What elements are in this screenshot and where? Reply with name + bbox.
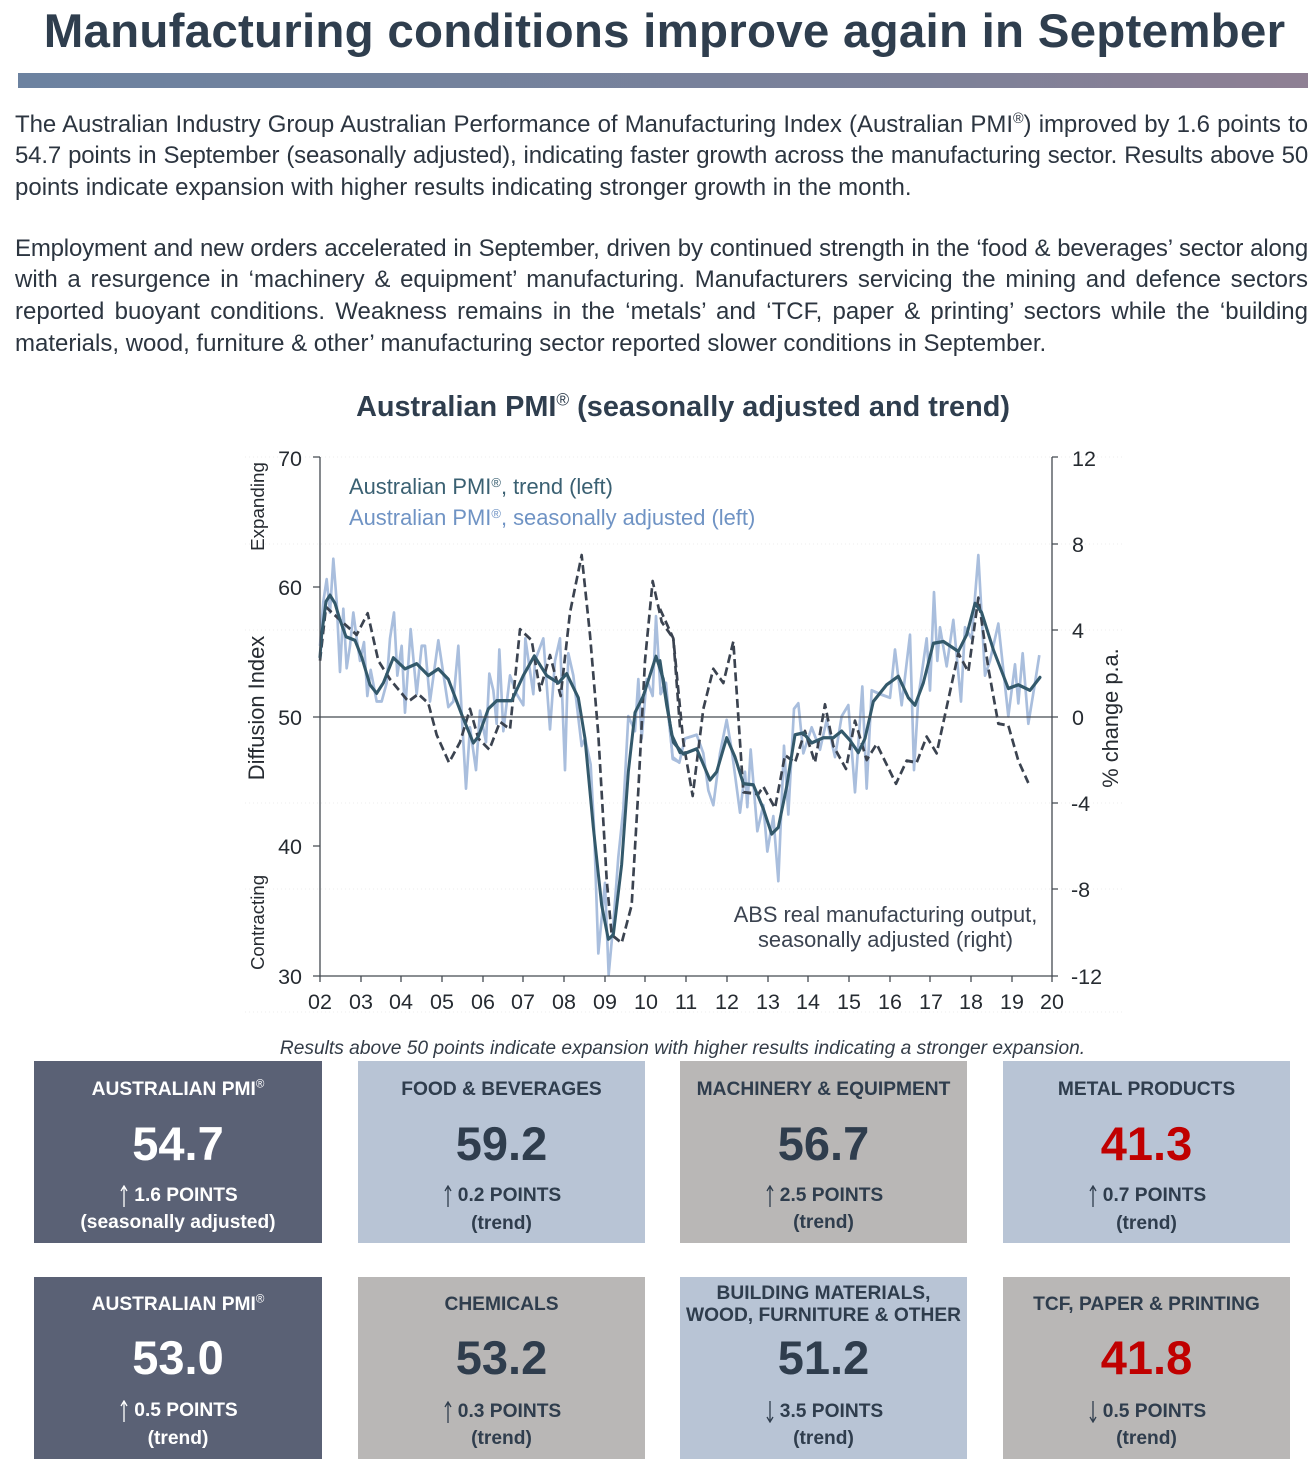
right axis labels: -4 <box>1071 792 1090 816</box>
card: TCF paper and printing: (trend) <box>1116 1428 1177 1449</box>
card: Australian PMI trend: 0.5 POINTS <box>134 1400 238 1421</box>
card: building materials: 3.5 POINTS <box>780 1401 883 1422</box>
x axis labels: 02 <box>308 990 332 1014</box>
card: chemicals: CHEMICALS <box>444 1294 559 1315</box>
card: building materials <box>680 1277 967 1459</box>
intro paragraph 2: Employment and new orders accelerated in September, driven by continued strength in the ‘food & beverages’ sector along <box>15 235 1308 262</box>
x axis labels: 13 <box>756 990 780 1014</box>
left axis labels: 70 <box>278 447 302 471</box>
card: metal products: METAL PRODUCTS <box>1058 1078 1235 1100</box>
card: Australian PMI seasonally adjusted: (seasonally adjusted) <box>80 1212 276 1233</box>
x axis labels: 16 <box>878 990 902 1014</box>
intro paragraph 1 <box>15 111 1308 201</box>
legend: ABS output: seasonally adjusted (right) <box>758 927 1013 952</box>
x axis labels: 18 <box>959 990 983 1014</box>
title rule bar <box>18 73 1308 88</box>
card: machinery and equipment <box>680 1061 967 1243</box>
legend: seasonally adjusted: ® <box>491 506 501 521</box>
right axis labels: -12 <box>1071 965 1102 989</box>
card: food and beverages <box>358 1061 645 1243</box>
card: machinery and equipment: MACHINERY & EQUIPMENT <box>697 1078 950 1100</box>
x axis labels: 11 <box>675 990 697 1014</box>
intro paragraph 1: 54.7 points in September (seasonally adjusted), indicating faster growth across the manufacturing sector. Results above 50 <box>15 142 1308 169</box>
title: Manufacturing conditions improve again in September <box>44 5 1285 58</box>
intro paragraph 2: materials, wood, furniture & other’ manufacturing sector reported slower conditions in September. <box>15 330 1046 357</box>
card: Australian PMI trend: AUSTRALIAN PMI® <box>92 1294 264 1315</box>
y axis note: Contracting: Contracting <box>247 875 268 970</box>
card: food and beverages: 0.2 POINTS <box>458 1185 561 1206</box>
right axis title: % change p.a. <box>1098 648 1123 788</box>
left axis labels: 50 <box>278 706 302 730</box>
x axis labels: 12 <box>715 990 739 1014</box>
card: chemicals: 53.2 <box>456 1331 547 1384</box>
legend: trend: Australian PMI <box>349 474 491 499</box>
chart heading: Australian PMI® (seasonally adjusted and trend) <box>356 389 1010 423</box>
card: chemicals: (trend) <box>471 1428 532 1449</box>
card: metal products: 41.3 <box>1101 1117 1192 1170</box>
x axis labels <box>308 990 1064 1014</box>
x axis labels: 05 <box>430 990 454 1014</box>
card: TCF paper and printing <box>1003 1277 1290 1459</box>
x axis labels: 09 <box>593 990 617 1014</box>
card: food and beverages: 59.2 <box>456 1117 547 1170</box>
intro paragraph 2 <box>15 235 1308 357</box>
left axis labels: 40 <box>278 835 302 859</box>
card: Australian PMI seasonally adjusted: 54.7 <box>132 1117 224 1170</box>
legend: seasonally adjusted: Australian PMI <box>349 505 491 530</box>
right axis labels: 4 <box>1072 619 1084 643</box>
intro paragraph 2: with a resurgence in ‘machinery & equipment’ manufacturing. Manufacturers servicing the mining and defence sectors <box>15 266 1308 293</box>
right axis labels: 8 <box>1072 533 1084 557</box>
legend: trend: ® <box>491 475 501 490</box>
card: Australian PMI trend: (trend) <box>148 1428 208 1449</box>
card: machinery and equipment: 56.7 <box>778 1117 869 1170</box>
x axis labels: 07 <box>511 990 535 1014</box>
seasonally adjusted series <box>320 555 1039 975</box>
card: building materials: (trend) <box>793 1428 854 1449</box>
card: Australian PMI seasonally adjusted: 1.6 POINTS <box>134 1185 238 1206</box>
legend: ABS output: ABS real manufacturing output, <box>734 902 1037 927</box>
left axis labels: 60 <box>278 576 302 600</box>
card: metal products: (trend) <box>1116 1213 1177 1234</box>
card: building materials: WOOD, FURNITURE & OTHER <box>686 1304 961 1326</box>
legend: trend: , trend (left) <box>501 474 613 499</box>
card: Australian PMI seasonally adjusted <box>34 1061 322 1243</box>
left axis labels: 30 <box>278 965 302 989</box>
intro paragraph 1: The Australian Industry Group Australian Performance of Manufacturing Index (Australian PMI®) improved by 1.6 points to <box>15 111 1308 138</box>
right axis labels: 12 <box>1072 447 1096 471</box>
x axis labels: 17 <box>919 990 943 1014</box>
card: food and beverages: (trend) <box>471 1213 532 1234</box>
x axis labels: 06 <box>471 990 495 1014</box>
chart footnote: Results above 50 points indicate expansion with higher results indicating a stronger expansion. <box>280 1038 1085 1059</box>
card: metal products <box>1003 1061 1290 1243</box>
y axis note: Expanding: Expanding <box>247 462 268 551</box>
right axis labels <box>1071 447 1102 989</box>
trend series <box>320 595 1040 939</box>
right axis labels: 0 <box>1072 706 1084 730</box>
x axis labels: 03 <box>349 990 373 1014</box>
card: metal products: 0.7 POINTS <box>1103 1185 1206 1206</box>
y axis title: Diffusion Index: Diffusion Index <box>244 636 269 780</box>
right axis labels: -8 <box>1071 878 1090 902</box>
card: building materials: 51.2 <box>778 1331 869 1384</box>
card: Australian PMI trend: 53.0 <box>132 1331 224 1384</box>
card: TCF paper and printing: 41.8 <box>1101 1331 1192 1384</box>
intro paragraph 1: points indicate expansion with higher results indicating stronger growth in the month. <box>15 174 912 201</box>
chart axes <box>313 457 1058 982</box>
card: TCF paper and printing: TCF, PAPER & PRINTING <box>1033 1294 1260 1315</box>
left axis labels <box>278 447 302 989</box>
card: machinery and equipment: 2.5 POINTS <box>780 1185 883 1206</box>
card: building materials: BUILDING MATERIALS, <box>717 1282 930 1304</box>
card: machinery and equipment: (trend) <box>793 1212 854 1233</box>
x axis labels: 04 <box>389 990 413 1014</box>
x axis labels: 14 <box>796 990 820 1014</box>
card: TCF paper and printing: 0.5 POINTS <box>1103 1401 1206 1422</box>
card: food and beverages: FOOD & BEVERAGES <box>401 1078 602 1100</box>
x axis labels: 15 <box>837 990 861 1014</box>
x axis labels: 10 <box>634 990 658 1014</box>
ABS output dashed series <box>320 555 1028 943</box>
x axis labels: 20 <box>1040 990 1064 1014</box>
legend: seasonally adjusted: , seasonally adjusted (left) <box>501 505 755 530</box>
card: Australian PMI seasonally adjusted: AUSTRALIAN PMI® <box>92 1078 264 1100</box>
card: chemicals: 0.3 POINTS <box>458 1401 561 1422</box>
x axis labels: 08 <box>552 990 576 1014</box>
line chart <box>244 447 1123 1014</box>
card: chemicals <box>358 1277 645 1459</box>
intro paragraph 2: reported buoyant conditions. Weakness remains in the ‘metals’ and ‘TCF, paper & printing’ sectors while the ‘building <box>15 298 1308 325</box>
x axis labels: 19 <box>1000 990 1024 1014</box>
legend: ABS output <box>734 902 1037 952</box>
card: Australian PMI trend <box>34 1277 322 1459</box>
